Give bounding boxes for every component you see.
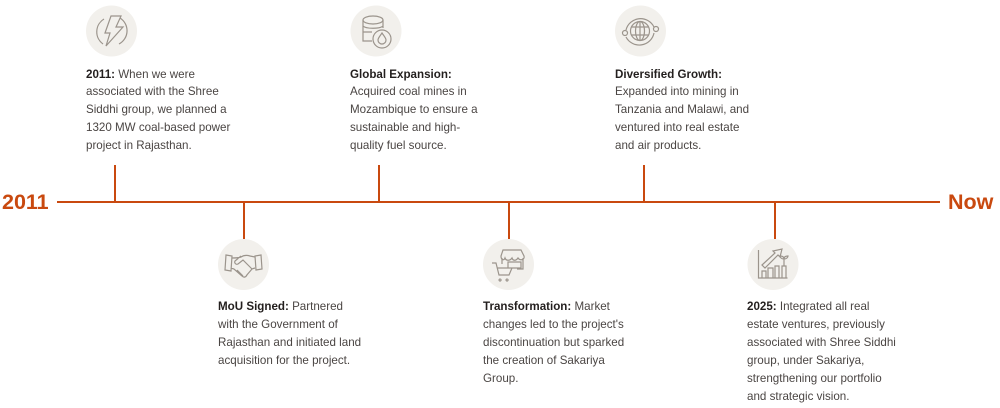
text: diversified growth: Diversified Growth:: [615, 68, 722, 80]
text: global expansion: Acquired coal mines in: [350, 85, 467, 98]
text: MoU signed: Rajasthan and initiated land: [218, 336, 361, 349]
text: 2025: strengthening our portfolio: [747, 372, 882, 385]
connector 2: [243, 202, 245, 239]
text: transformation: [483, 300, 624, 385]
text: global expansion: Global Expansion:: [350, 68, 452, 80]
text: transformation: discontinuation but sparked: [483, 336, 624, 349]
connector 1: [114, 165, 116, 202]
text: 2011: 2011: When we were: [86, 68, 195, 80]
text: MoU signed: MoU Signed: Partnered: [218, 300, 343, 313]
text: global expansion: sustainable and high-: [350, 121, 460, 134]
icon: lightning power: [86, 6, 137, 56]
connector 5: [643, 165, 645, 202]
text: 2011: 1320 MW coal-based power: [86, 121, 230, 134]
icon: handshake: [218, 239, 269, 290]
text: 2025: associated with Shree Siddhi: [747, 336, 896, 349]
text: 2011: Siddhi group, we planned a: [86, 103, 227, 116]
connector 3: [378, 165, 380, 202]
text: diversified growth: Tanzania and Malawi, and: [615, 103, 749, 116]
text: 2025: 2025: Integrated all real: [747, 300, 869, 313]
text: transformation: the creation of Sakariya: [483, 354, 605, 367]
text: diversified growth: Expanded into mining in: [615, 85, 739, 98]
text: transformation: Group.: [483, 372, 518, 385]
connector 4: [508, 202, 510, 239]
icon: shop and cart: [483, 239, 534, 290]
text: 2011: [86, 68, 230, 152]
text: diversified growth: and air products.: [615, 139, 701, 152]
text: 2011: project in Rajasthan.: [86, 139, 192, 152]
text: 2025: group, under Sakariya,: [747, 354, 864, 367]
icon: growth chart: [748, 239, 798, 290]
text: MoU signed: with the Government of: [218, 318, 338, 331]
start label: 2011: [2, 190, 49, 214]
timeline axis: [57, 201, 940, 203]
text: 2025: and strategic vision.: [747, 390, 849, 403]
text: 2025: [747, 300, 896, 403]
text: transformation: Transformation: Market: [483, 300, 610, 313]
text: global expansion: Mozambique to ensure a: [350, 103, 478, 116]
text: diversified growth: [615, 68, 749, 152]
text: MoU signed: acquisition for the project.: [218, 354, 350, 367]
connector 6: [774, 202, 776, 239]
text: diversified growth: ventured into real estate: [615, 121, 739, 134]
text: 2011: associated with the Shree: [86, 85, 219, 98]
text: 2025: estate ventures, previously: [747, 318, 885, 331]
icon: coal barrel and drop: [350, 6, 402, 56]
text: transformation: changes led to the project's: [483, 318, 624, 331]
end label: Now: [948, 190, 993, 214]
text: global expansion: quality fuel source.: [350, 139, 447, 152]
text: global expansion: [350, 68, 478, 152]
icon: globe with orbit: [615, 6, 666, 56]
text: MoU signed: [218, 300, 361, 367]
